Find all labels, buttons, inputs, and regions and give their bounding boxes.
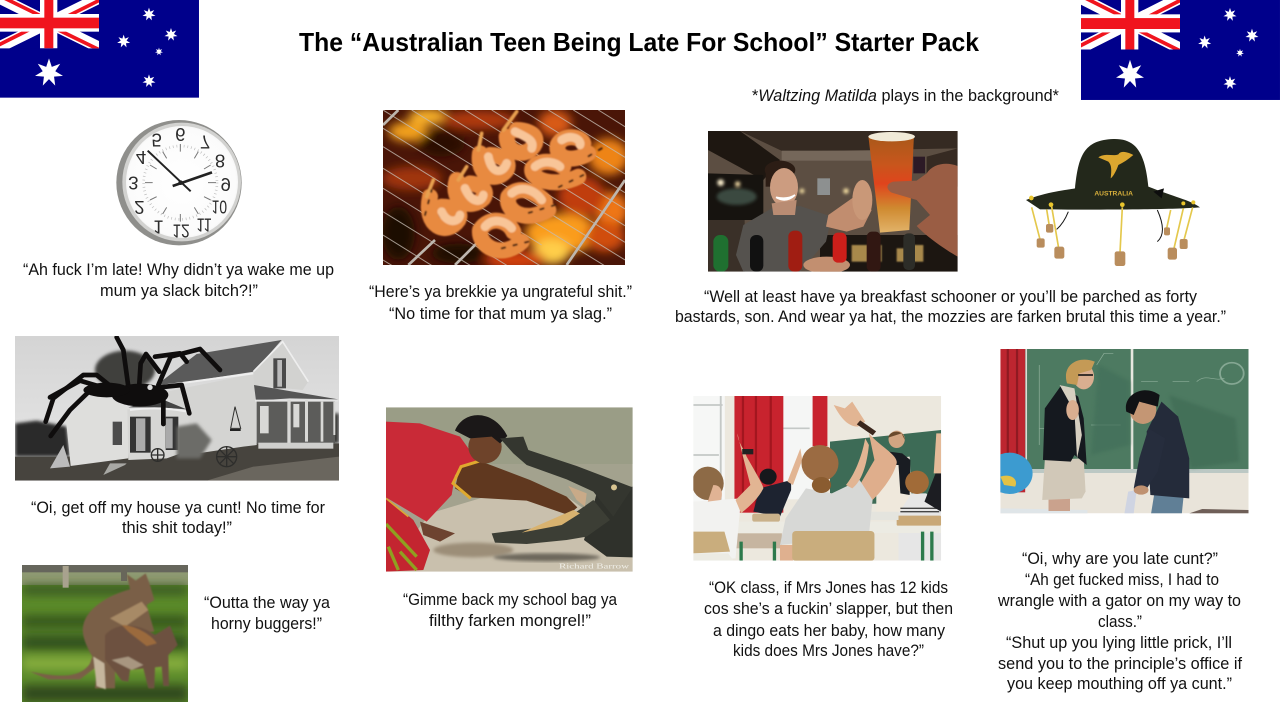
hand: [887, 164, 958, 257]
girl at right: [899, 493, 928, 514]
caption: clock: “Ah fuck I’m late! Why didn’t ya wake me up: [23, 261, 334, 279]
porch: [257, 401, 335, 444]
caption: prawns: “No time for that mum ya slag.”: [389, 305, 612, 323]
caption: classroom: cos she’s a fuckin’ slapper, but then: [704, 600, 953, 618]
icon: mirrored wall clock: 10: [212, 196, 227, 217]
steps: [103, 463, 127, 475]
caption: prawns: “Here’s ya brekkie ya ungrateful shit.”: [369, 283, 632, 301]
caption: classroom: “OK class, if Mrs Jones has 12 kids: [709, 579, 948, 597]
spider: [46, 337, 220, 436]
watermark: Richard Barrow: [559, 561, 630, 570]
globe: [1000, 452, 1033, 494]
caption: teacher scolding: class.”: [1098, 613, 1142, 631]
centre pupil: [861, 434, 897, 500]
caption: prawns: [369, 283, 632, 323]
dark-shirt pupil: [753, 480, 791, 517]
photo: man with hand in crocodile jaws: [386, 407, 633, 572]
caption: crocodile: “Gimme back my school bag ya: [403, 591, 618, 609]
teacher: [876, 456, 912, 504]
barmaid: [736, 206, 832, 272]
caption: schooner and hat: “Well at least have ya breakfast schooner or you’ll be parched as forty: [704, 288, 1198, 306]
beer glass: [868, 135, 914, 233]
caption: spider: “Oi, get off my house ya cunt! No time for: [31, 499, 325, 517]
crocodile: [584, 487, 633, 557]
background music note: *Waltzing Matilda plays in the background*: [752, 87, 1060, 105]
icon: mirrored wall clock: 11: [196, 215, 212, 236]
icon: mirrored wall clock: 6: [175, 124, 186, 145]
caption: crocodile: filthy farken mongrel!”: [429, 612, 591, 630]
kangaroo front: [105, 626, 178, 688]
icon: mirrored wall clock: 1: [153, 216, 164, 237]
caption: schooner and hat: bastards, son. And wear ya hat, the mozzies are farken brutal this time a year.”: [675, 308, 1226, 326]
caption: kangaroos: horny buggers!”: [211, 615, 322, 633]
icon: mirrored wall clock: 4: [136, 147, 146, 168]
caption: teacher scolding: you keep mouthing off ya cunt.”: [1007, 675, 1232, 693]
photo: cork hat: AUSTRALIA: [1094, 191, 1133, 198]
panel: grilled prawns: [369, 108, 632, 323]
photo: barmaid with schooner: [708, 131, 958, 272]
caption: teacher scolding: “Oi, why are you late cunt?”: [1022, 550, 1218, 568]
caption: kangaroos: [204, 594, 331, 633]
icon: mirrored wall clock: 12: [172, 221, 190, 242]
caption: clock: mum ya slack bitch?!”: [100, 282, 258, 300]
panel: crocodile: [386, 407, 633, 630]
photo: prawns on barbecue: [383, 110, 625, 265]
caption: classroom: kids does Mrs Jones have?”: [733, 642, 924, 660]
photo: kangaroos: [22, 565, 188, 702]
caption: teacher scolding: wrangle with a gator on my way to: [997, 592, 1241, 610]
panel: classroom: [692, 396, 953, 660]
taps: [713, 235, 728, 272]
caption: teacher scolding: “Ah get fucked miss, I had to: [1025, 571, 1219, 589]
photo: teacher and boy at blackboard: [1000, 349, 1248, 514]
flag: top right: [1071, 0, 1280, 100]
icon: mirrored wall clock: 9: [220, 174, 231, 195]
kangaroo back: [30, 573, 178, 689]
caption: teacher scolding: [997, 550, 1242, 693]
caption: teacher scolding: “Shut up you lying little prick, I’ll: [1006, 634, 1232, 652]
man: [386, 422, 477, 522]
panel: clock: [23, 120, 334, 300]
main house: [168, 380, 257, 453]
panel: teacher scolding: [987, 349, 1249, 693]
caption: crocodile: [403, 591, 618, 630]
caption: classroom: a dingo eats her baby, how many: [713, 622, 946, 640]
caption: classroom: [704, 579, 953, 660]
left pupil: [693, 498, 741, 561]
wagon wheels: [151, 407, 241, 467]
caption: teacher scolding: send you to the principle’s office if: [998, 655, 1242, 673]
photo: students raising hands: [693, 396, 942, 561]
photo: spider on farmhouse: [15, 336, 339, 481]
icon: mirrored wall clock: [116, 120, 242, 246]
panel: kangaroos: [22, 565, 331, 702]
title: The “Australian Teen Being Late For School” Starter Pack: [299, 27, 980, 57]
boy: [1151, 495, 1184, 513]
panel: schooner and hat: [675, 131, 1226, 326]
annex: [66, 424, 128, 466]
caption: spider: [31, 499, 325, 537]
icon: mirrored wall clock: 3: [128, 172, 139, 193]
icon: mirrored wall clock: 7: [200, 131, 210, 152]
caption: clock: [23, 261, 334, 300]
icon: mirrored wall clock: 2: [134, 197, 145, 218]
icon: mirrored wall clock: 8: [215, 150, 225, 171]
caption: spider: this shit today!”: [122, 519, 232, 537]
icon: mirrored wall clock: 5: [151, 130, 162, 151]
teacher: [1049, 498, 1070, 511]
panel: giant spider on house: [15, 336, 339, 537]
photo: cork hat: [1026, 139, 1200, 266]
caption: kangaroos: “Outta the way ya: [204, 594, 331, 612]
desks and chairs: [734, 522, 941, 533]
flag: top left: [0, 0, 199, 98]
caption: schooner and hat: [675, 288, 1226, 326]
